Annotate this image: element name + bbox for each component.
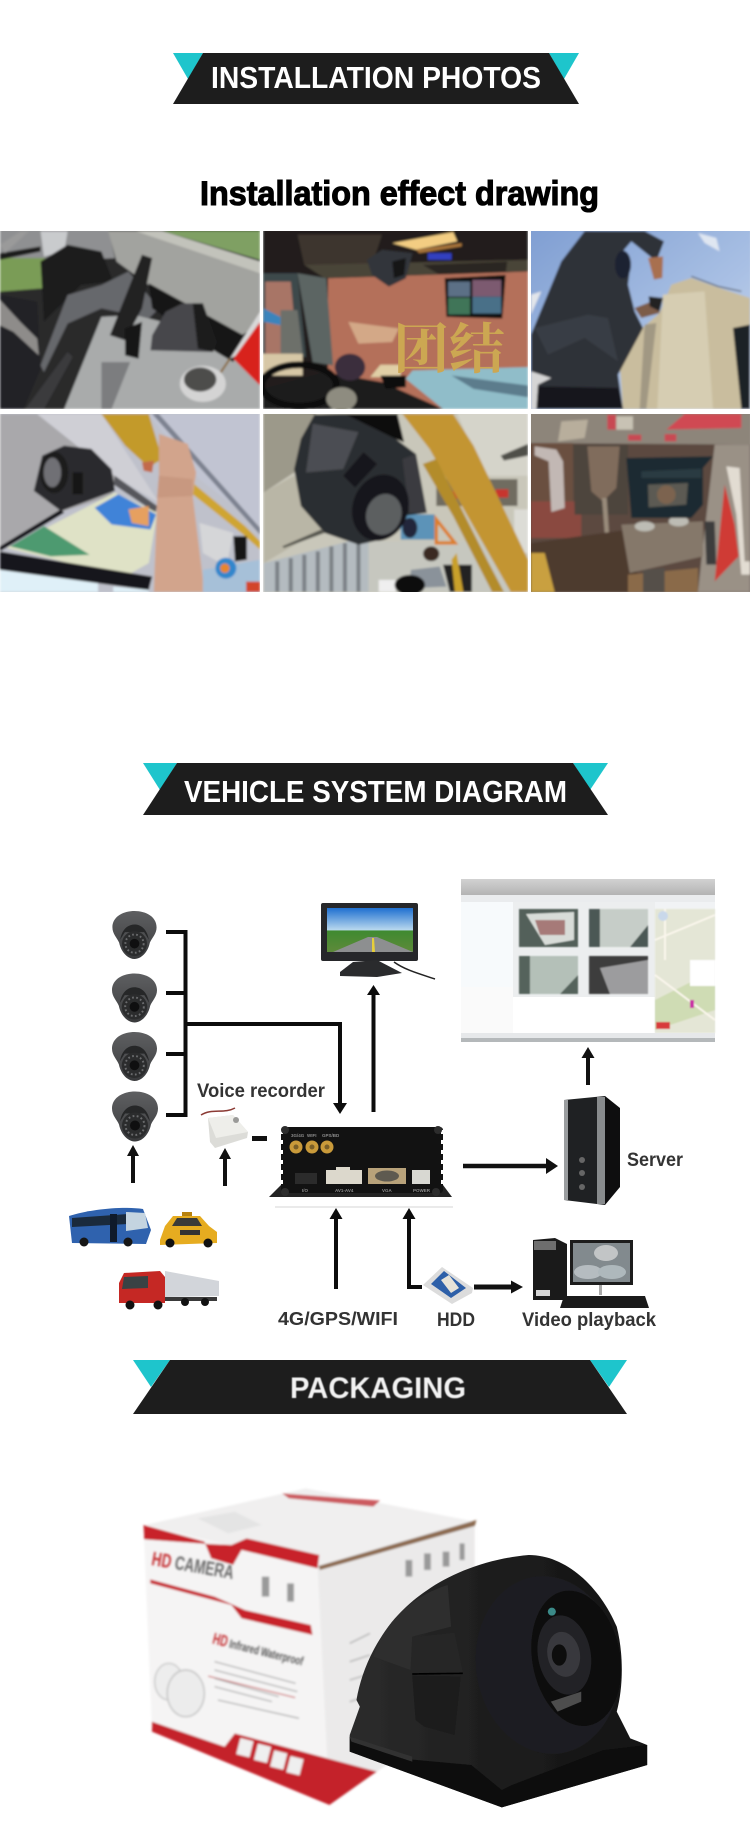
label: voice recorder: Voice recorder <box>197 1080 325 1102</box>
arrow: recorder to server <box>463 1158 558 1174</box>
recorder port labels: 3G/4G <box>291 1133 305 1138</box>
arrow: server to software <box>582 1047 594 1085</box>
recorder port labels: AV1-AV4 <box>335 1188 354 1193</box>
label: server: Server <box>627 1149 683 1171</box>
arrow: HDD to recorder <box>402 1208 422 1289</box>
diagram: vehicle system <box>69 879 715 1331</box>
icon: dome camera 2 <box>112 974 157 1022</box>
arrow: HDD to playback <box>474 1280 523 1294</box>
arrow: bus to camera <box>127 1145 139 1183</box>
icon: voice recorder box <box>201 1108 248 1148</box>
banner title: packaging: PACKAGING <box>290 1372 466 1405</box>
icon: dome camera 4 <box>112 1092 158 1142</box>
icon: in-car monitor <box>321 903 435 979</box>
icon: truck <box>119 1271 219 1310</box>
gold characters on windshield: 团结 <box>393 319 505 380</box>
product box <box>142 1488 478 1806</box>
photo: camera in truck cab windshield <box>263 231 528 409</box>
arrow: 4G/GPS/WiFi to recorder <box>330 1208 342 1289</box>
photo: technician installing camera on truck <box>531 231 750 409</box>
icon: server tower <box>564 1096 620 1205</box>
recorder port labels: I/O <box>302 1188 309 1193</box>
box text: HD camera: HD CAMERA <box>150 1548 235 1584</box>
photo: side camera on bus ceiling near yellow handrail <box>0 414 260 592</box>
icon: mobile video recorder <box>269 1126 452 1197</box>
label: HDD: HDD <box>437 1309 475 1331</box>
recorder port labels <box>291 1133 431 1193</box>
banner title: installation photos: INSTALLATION PHOTOS <box>211 60 541 95</box>
connector: voice recorder to recorder <box>252 1136 267 1141</box>
recorder port labels: GPS/BD <box>322 1133 340 1138</box>
photo: rear camera mounted under truck <box>531 414 750 592</box>
heading: installation effect drawing: Installation effect drawing <box>200 175 599 213</box>
recorder port labels: POWER <box>413 1188 431 1193</box>
recorder shadow line <box>275 1206 453 1208</box>
photo: close-up side camera inside bus <box>263 414 528 592</box>
banner: installation photos <box>173 53 579 104</box>
box text: HD infrared waterproof: HD Infrared Waterproof <box>211 1631 306 1670</box>
icon: taxi <box>160 1212 217 1248</box>
label: video playback: Video playback <box>522 1309 656 1331</box>
arrow: recorder to monitor <box>367 985 380 1112</box>
recorder port labels: VGA <box>382 1188 393 1193</box>
icon: hard drive <box>423 1267 473 1304</box>
screenshot: monitoring software <box>461 879 715 1042</box>
icon: dome camera 1 <box>112 911 157 959</box>
recorder port labels: WIFI <box>307 1133 316 1138</box>
connector: camera bus to recorder <box>166 932 347 1115</box>
photo: camera on bus dashboard <box>0 231 260 409</box>
icon: playback computer <box>533 1238 649 1308</box>
arrow: vehicle to voice recorder <box>219 1148 231 1186</box>
product camera <box>350 1555 648 1808</box>
icon: dome camera 3 <box>112 1032 157 1081</box>
banner: packaging <box>133 1360 627 1414</box>
icon: bus <box>69 1208 151 1246</box>
banner title: vehicle system diagram: VEHICLE SYSTEM DIAGRAM <box>184 774 567 809</box>
label: 4G/GPS/WIFI: 4G/GPS/WIFI <box>278 1308 398 1329</box>
banner: vehicle system diagram <box>143 763 608 815</box>
